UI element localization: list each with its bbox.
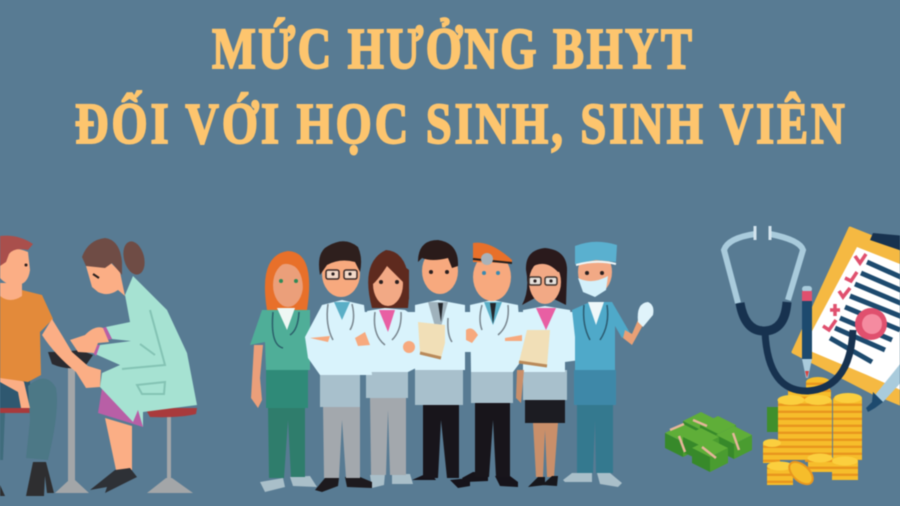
doctor 4: man with clipboard	[412, 240, 470, 488]
illustration: medical team	[250, 240, 653, 492]
patient	[0, 236, 101, 496]
nurse	[70, 238, 197, 493]
cash bundles	[665, 412, 752, 472]
doctor 6: woman with clipboard	[516, 248, 580, 487]
illustration: clipboard, stethoscope, money	[665, 226, 900, 488]
arm pad	[48, 350, 93, 368]
clipboard	[793, 228, 900, 406]
back stack	[788, 390, 831, 410]
small stacks	[763, 443, 780, 463]
checklist lines	[830, 262, 900, 362]
syringe	[866, 358, 900, 412]
doctor 5: man with head mirror	[462, 243, 522, 487]
shared coat band	[360, 312, 575, 352]
coins	[763, 377, 862, 488]
illustration: patient and nurse	[0, 236, 197, 496]
green block behind coins	[767, 407, 779, 432]
doctor 7: surgeon	[563, 242, 653, 487]
title line 2: ĐỐI VỚI HỌC SINH, SINH VIÊN	[75, 90, 845, 156]
doctor 2: man with glasses	[305, 241, 372, 492]
pen	[802, 286, 812, 378]
doctor 1: green scrubs	[250, 251, 317, 492]
stethoscope	[724, 226, 887, 391]
title	[75, 17, 845, 156]
doctor 3: woman in white coat	[366, 250, 422, 488]
check marks	[823, 254, 866, 330]
title line 1: MỨC HƯỞNG BHYT	[212, 17, 692, 81]
stools and stand	[55, 368, 193, 493]
main stacks	[778, 400, 805, 460]
